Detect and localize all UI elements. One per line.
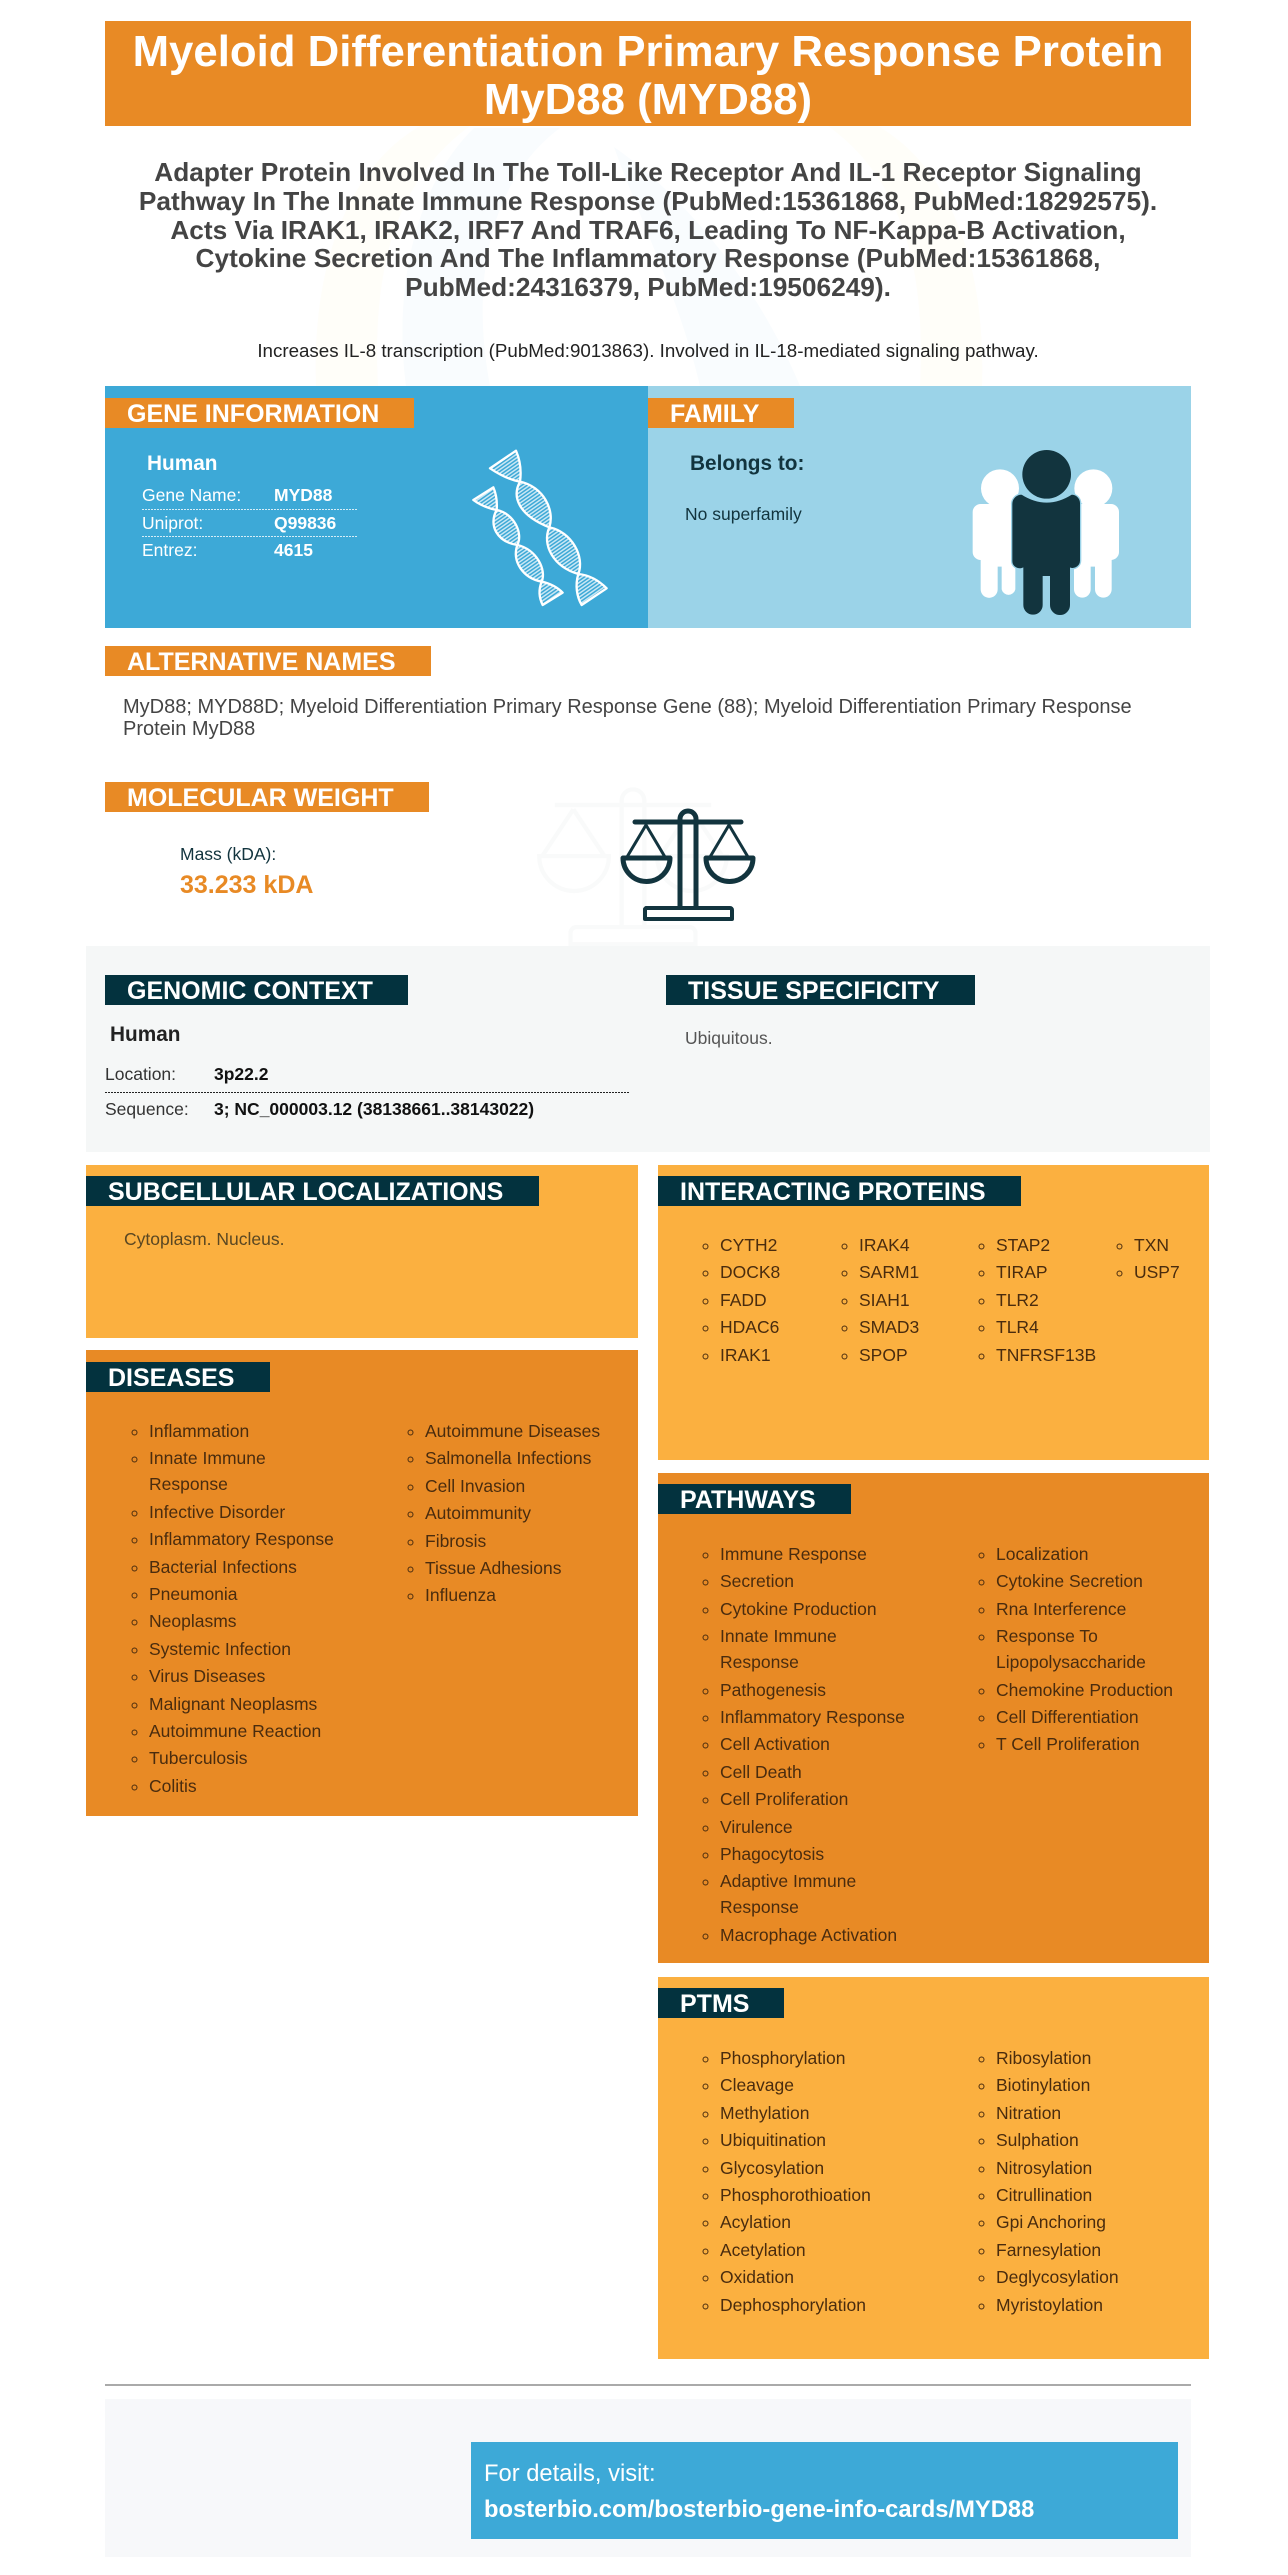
ptms column 2: Ribosylation xyxy=(996,2048,1091,2068)
pathways column 2: Lipopolysaccharide xyxy=(996,1652,1146,1672)
gene name row xyxy=(142,485,332,505)
proteins column 3: TLR2 xyxy=(996,1290,1039,1310)
sequence row: Sequence: xyxy=(105,1099,189,1119)
diseases list column 2: Tissue Adhesions xyxy=(425,1558,562,1578)
callout label: For details, visit: xyxy=(484,2460,656,2487)
diseases list column 1: Inflammatory Response xyxy=(149,1529,334,1549)
ptms column 2: Sulphation xyxy=(996,2130,1079,2150)
proteins column 3: TNFRSF13B xyxy=(996,1345,1096,1365)
sequence row: 3; NC_000003.12 (38138661..38143022) xyxy=(214,1099,534,1119)
species label: Human xyxy=(110,1023,180,1046)
diseases list column 1: Tuberculosis xyxy=(149,1748,248,1768)
proteins column 1: FADD xyxy=(720,1290,767,1310)
ptms column 2: Biotinylation xyxy=(996,2075,1090,2095)
belongs to label: Belongs to: xyxy=(690,452,804,475)
proteins column 2: IRAK4 xyxy=(859,1235,910,1255)
diseases list column 1: Autoimmune Reaction xyxy=(149,1721,321,1741)
ptms column 2: Gpi Anchoring xyxy=(996,2212,1106,2232)
panel: pathways xyxy=(658,1473,1209,1963)
pathways column 1: Secretion xyxy=(720,1571,794,1591)
ptms column 1 xyxy=(702,2048,871,2315)
diseases list column 2 xyxy=(408,1421,600,1605)
pathways column 1: Response xyxy=(720,1652,799,1672)
pathways column 1 xyxy=(702,1544,905,1945)
diseases list column 1: Inflammation xyxy=(149,1421,249,1441)
proteins column 4: TXN xyxy=(1134,1235,1169,1255)
alternative names text: MyD88; MYD88D; Myeloid Differentiation Primary Response Gene (88); Myeloid Differentiation Primary Response xyxy=(123,696,1132,718)
diseases list column 2: Autoimmunity xyxy=(425,1503,531,1523)
diseases list column 2: Fibrosis xyxy=(425,1531,486,1551)
proteins column 2: SARM1 xyxy=(859,1262,919,1282)
diseases list column 1: Innate Immune xyxy=(149,1448,266,1468)
description: Cytokine Secretion And The Inflammatory Response (PubMed:15361868, xyxy=(196,243,1100,273)
species label: Human xyxy=(147,452,217,475)
heading: ptms xyxy=(658,1988,784,2018)
pathways column 1: Cytokine Production xyxy=(720,1599,877,1619)
pathways column 2: Localization xyxy=(996,1544,1088,1564)
pathways column 1: Cell Death xyxy=(720,1762,802,1782)
panel: gene information xyxy=(105,386,648,628)
proteins column 1: IRAK1 xyxy=(720,1345,771,1365)
proteins column 2: SIAH1 xyxy=(859,1290,910,1310)
pathways column 1: Virulence xyxy=(720,1817,793,1837)
diseases list column 1: Virus Diseases xyxy=(149,1666,265,1686)
proteins column 1: CYTH2 xyxy=(720,1235,777,1255)
ptms column 2: Nitrosylation xyxy=(996,2158,1092,2178)
pathways column 2: Response To xyxy=(996,1626,1098,1646)
proteins column 3: TLR4 xyxy=(996,1317,1039,1337)
pathways column 1: Inflammatory Response xyxy=(720,1707,905,1727)
title: MyD88 (MYD88) xyxy=(484,75,812,124)
pathways column 2: Rna Interference xyxy=(996,1599,1126,1619)
ptms column 1: Methylation xyxy=(720,2103,810,2123)
pathways column 1: Adaptive Immune xyxy=(720,1871,856,1891)
diseases list column 1: Systemic Infection xyxy=(149,1639,291,1659)
heading: tissue specificity: TISSUE SPECIFICITY xyxy=(688,977,939,1005)
pathways column 1: Pathogenesis xyxy=(720,1680,826,1700)
description: PubMed:24316379, PubMed:19506249). xyxy=(405,272,891,302)
alternative names text xyxy=(123,696,1132,740)
panel: footer xyxy=(105,2399,1191,2557)
ptms column 1: Acylation xyxy=(720,2212,791,2232)
proteins column 3: TIRAP xyxy=(996,1262,1048,1282)
pathways column 1: Macrophage Activation xyxy=(720,1925,897,1945)
panel: subcellular localizations xyxy=(86,1165,638,1338)
heading: family: FAMILY xyxy=(670,400,759,428)
diseases list column 2: Cell Invasion xyxy=(425,1476,525,1496)
diseases list column 2: Autoimmune Diseases xyxy=(425,1421,600,1441)
description: Acts Via IRAK1, IRAK2, IRF7 And TRAF6, Leading To NF-Kappa-B Activation, xyxy=(170,215,1126,245)
icon: dna xyxy=(472,450,608,606)
uniprot row: Uniprot: xyxy=(142,513,203,533)
proteins column 1: HDAC6 xyxy=(720,1317,779,1337)
title xyxy=(105,21,1191,126)
description: Adapter Protein Involved In The Toll-Like Receptor And IL-1 Receptor Signaling xyxy=(154,157,1142,187)
heading: molecular weight: MOLECULAR WEIGHT xyxy=(127,784,394,812)
heading: interacting proteins: INTERACTING PROTEINS xyxy=(680,1178,986,1206)
secondary description: Increases IL-8 transcription (PubMed:9013863). Involved in IL-18-mediated signaling pathway. xyxy=(257,340,1039,361)
location row: Location: xyxy=(105,1064,176,1084)
pathways column 1: Cell Activation xyxy=(720,1734,830,1754)
ptms column 1: Ubiquitination xyxy=(720,2130,826,2150)
pathways column 1: Response xyxy=(720,1897,799,1917)
mass label: Mass (kDA): xyxy=(180,844,276,864)
ptms column 1: Phosphorothioation xyxy=(720,2185,871,2205)
mass value: 33.233 kDA xyxy=(180,871,313,899)
pathways column 2 xyxy=(978,1544,1173,1754)
proteins column 1: DOCK8 xyxy=(720,1262,780,1282)
pathways column 1: Phagocytosis xyxy=(720,1844,824,1864)
heading: genomic context: GENOMIC CONTEXT xyxy=(127,977,373,1005)
uniprot row: Q99836 xyxy=(274,513,336,533)
uniprot row xyxy=(142,513,336,533)
gene name row: MYD88 xyxy=(274,485,332,505)
callout: details link xyxy=(471,2442,1178,2539)
diseases list column 1: Response xyxy=(149,1474,228,1494)
diseases list column 1: Neoplasms xyxy=(149,1611,237,1631)
entrez row: Entrez: xyxy=(142,540,197,560)
diseases list column 1: Malignant Neoplasms xyxy=(149,1694,317,1714)
proteins column 4 xyxy=(1116,1235,1180,1282)
proteins column 4: USP7 xyxy=(1134,1262,1180,1282)
tissue specificity text: Ubiquitous. xyxy=(685,1028,773,1048)
icon: people xyxy=(972,450,1119,615)
diseases list column 1: Pneumonia xyxy=(149,1584,238,1604)
heading: pathways: PATHWAYS xyxy=(680,1486,816,1514)
panel: genomic context and tissue specificity xyxy=(86,946,1210,1152)
heading: gene information: GENE INFORMATION xyxy=(127,400,379,428)
ptms column 1: Dephosphorylation xyxy=(720,2295,866,2315)
panel: ptms xyxy=(658,1977,1209,2359)
description: Pathway In The Innate Immune Response (PubMed:15361868, PubMed:18292575). xyxy=(139,186,1157,216)
pathways column 1: Immune Response xyxy=(720,1544,867,1564)
gene name row: Gene Name: xyxy=(142,485,241,505)
entrez row: 4615 xyxy=(274,540,313,560)
proteins column 3 xyxy=(978,1235,1096,1365)
diseases list column 2: Influenza xyxy=(425,1585,496,1605)
superfamily value: No superfamily xyxy=(685,504,802,524)
ptms column 2: Deglycosylation xyxy=(996,2267,1119,2287)
heading: ptms: PTMS xyxy=(680,1990,749,2018)
location row xyxy=(105,1064,268,1084)
description xyxy=(139,157,1157,302)
diseases list column 1: Bacterial Infections xyxy=(149,1557,297,1577)
diseases list column 2: Salmonella Infections xyxy=(425,1448,591,1468)
pathways column 2: T Cell Proliferation xyxy=(996,1734,1140,1754)
ptms column 1: Glycosylation xyxy=(720,2158,824,2178)
ptms column 1: Acetylation xyxy=(720,2240,806,2260)
diseases list column 1: Colitis xyxy=(149,1776,197,1796)
heading: diseases xyxy=(86,1362,270,1392)
heading: alternative names: ALTERNATIVE NAMES xyxy=(127,648,396,676)
callout url: bosterbio.com/bosterbio-gene-info-cards/MYD88 xyxy=(484,2496,1034,2523)
pathways column 1: Innate Immune xyxy=(720,1626,837,1646)
ptms column 2: Citrullination xyxy=(996,2185,1092,2205)
ptms column 1: Cleavage xyxy=(720,2075,794,2095)
proteins column 2 xyxy=(842,1235,919,1365)
proteins column 1 xyxy=(702,1235,780,1365)
heading: pathways xyxy=(658,1484,851,1514)
alternative names text: Protein MyD88 xyxy=(123,718,255,740)
proteins column 3: STAP2 xyxy=(996,1235,1050,1255)
panel: family xyxy=(648,386,1191,628)
ptms column 2: Farnesylation xyxy=(996,2240,1101,2260)
icon: balance scale xyxy=(620,808,756,921)
ptms column 2 xyxy=(978,2048,1119,2315)
proteins column 2: SPOP xyxy=(859,1345,908,1365)
ptms column 1: Oxidation xyxy=(720,2267,794,2287)
ptms column 2: Myristoylation xyxy=(996,2295,1103,2315)
pathways column 2: Cell Differentiation xyxy=(996,1707,1139,1727)
ptms column 1: Phosphorylation xyxy=(720,2048,846,2068)
ptms column 2: Nitration xyxy=(996,2103,1061,2123)
panel: diseases xyxy=(86,1350,638,1816)
pathways column 1: Cell Proliferation xyxy=(720,1789,848,1809)
heading: diseases: DISEASES xyxy=(108,1364,234,1392)
pathways column 2: Chemokine Production xyxy=(996,1680,1173,1700)
location row: 3p22.2 xyxy=(214,1064,268,1084)
localization text: Cytoplasm. Nucleus. xyxy=(124,1229,284,1249)
title: Myeloid Differentiation Primary Response Protein xyxy=(133,27,1163,76)
diseases list column 1 xyxy=(132,1421,334,1796)
pathways column 2: Cytokine Secretion xyxy=(996,1571,1143,1591)
entrez row xyxy=(142,540,313,560)
diseases list column 1: Infective Disorder xyxy=(149,1502,285,1522)
heading: subcellular localizations: SUBCELLULAR LOCALIZATIONS xyxy=(108,1178,503,1206)
heading: family xyxy=(648,398,794,428)
panel: interacting proteins xyxy=(658,1165,1209,1460)
proteins column 2: SMAD3 xyxy=(859,1317,919,1337)
